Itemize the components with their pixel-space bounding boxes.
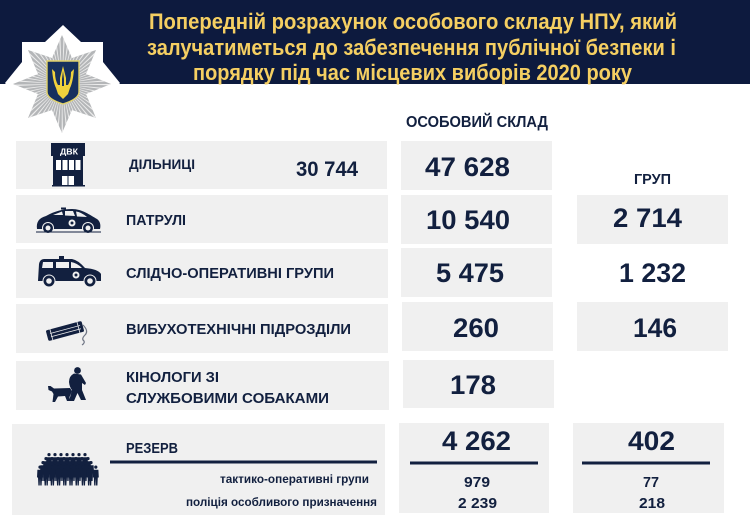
label: тактико-оперативні групи: тактико-оперативні групи	[220, 472, 369, 486]
title: порядку під час місцевих виборів 2020 року	[193, 60, 633, 85]
value panel: резерв груп: 402	[628, 426, 675, 456]
title: Попередній розрахунок особового складу НПУ, який	[149, 9, 677, 34]
label: патрулі: ПАТРУЛІ	[126, 213, 186, 229]
value: групи 1 232: 1 232	[619, 258, 686, 288]
value panel: 260: 260	[453, 313, 499, 343]
label: кінологи зі службовими собаками: СЛУЖБОВИМИ СОБАКАМИ	[126, 391, 329, 407]
value panel: 5 475	[401, 248, 552, 297]
icon: investigators van	[38, 256, 101, 287]
value panel: групи 146: 146	[633, 313, 677, 343]
icon: crowd of officers	[37, 453, 99, 486]
label: кінологи зі службовими собаками: КІНОЛОГИ ЗІ	[126, 370, 219, 386]
value panel: групи 2 714: 2 714	[613, 203, 682, 233]
header band	[0, 0, 750, 84]
value panel: 10 540	[401, 195, 552, 244]
panel: вибухотехнічні підрозділи	[16, 304, 388, 353]
label: поліція особливого призначення: поліція особливого призначення	[186, 495, 377, 509]
value panel: 10 540: 10 540	[426, 205, 510, 235]
value: 30 744: 30 744	[296, 158, 358, 181]
icon: dynamite	[46, 320, 87, 345]
value panel: 47 628: 47 628	[425, 152, 510, 182]
icon: patrol car	[36, 208, 101, 234]
value panel: резерв особовий склад: 2 239	[458, 495, 497, 512]
value panel: резерв груп: 218	[639, 495, 665, 512]
value panel: 47 628	[401, 141, 552, 190]
value panel: 178: 178	[450, 370, 496, 400]
column heading: груп: ГРУП	[634, 172, 671, 188]
label: резерв: РЕЗЕРВ	[126, 440, 178, 457]
title	[147, 9, 677, 85]
title: залучатиметься до забезпечення публічної безпеки і	[147, 35, 676, 60]
value panel: резерв особовий склад	[399, 423, 549, 513]
value panel: резерв особовий склад: 4 262	[442, 426, 511, 456]
value panel: групи 146	[577, 302, 728, 351]
value panel: групи 2 714	[577, 195, 728, 244]
value panel: резерв особовий склад: 979	[464, 474, 490, 491]
panel: дільниці	[16, 141, 387, 189]
column heading: особовий склад: ОСОБОВИЙ СКЛАД	[406, 113, 548, 131]
icon: polling station building: ДВК	[60, 146, 79, 156]
label: вибухотехнічні підрозділи: ВИБУХОТЕХНІЧНІ ПІДРОЗДІЛИ	[126, 322, 351, 338]
panel: кінологи	[16, 361, 389, 410]
label: дільниці: ДІЛЬНИЦІ	[129, 156, 195, 172]
icon: police star badge	[5, 25, 120, 142]
label: кінологи зі службовими собаками	[126, 370, 329, 407]
value panel: 260	[402, 302, 553, 351]
panel: патрулі	[16, 195, 388, 243]
value panel: резерв груп: 77	[643, 474, 659, 491]
panel: слідчо-оперативні групи	[16, 249, 388, 298]
icon: polling station building	[51, 143, 85, 186]
value panel: 178	[403, 360, 554, 408]
label: слідчо-оперативні групи: СЛІДЧО-ОПЕРАТИВНІ ГРУПИ	[126, 266, 334, 282]
icon: handler with dog	[48, 367, 86, 402]
panel: резерв	[12, 424, 385, 515]
value panel: резерв груп	[573, 423, 724, 513]
value panel: 5 475: 5 475	[436, 258, 504, 288]
